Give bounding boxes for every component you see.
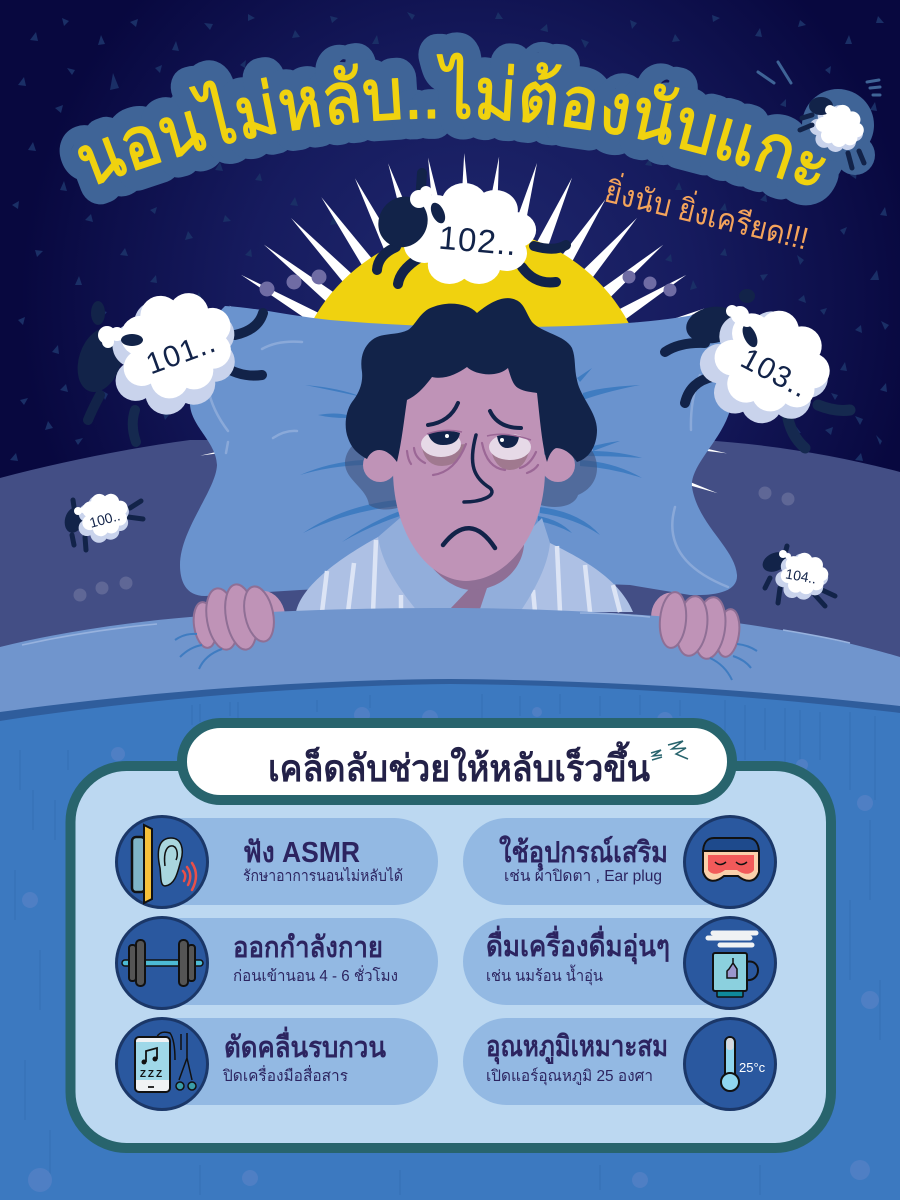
tip: warm drinks: เช่น นมร้อน น้ำอุ่น [486, 964, 603, 986]
title: นอนไม่หลับ..ไม่ต้องนับแกะ [78, 52, 826, 186]
blanket [0, 608, 900, 1200]
blanket texture [15, 694, 880, 1195]
left eye [421, 430, 462, 457]
hill dots [74, 486, 794, 602]
icon: thermometer: 25°c [739, 1060, 766, 1075]
tip: temperature: เปิดแอร์อุณหภูมิ 25 องศา [486, 1067, 653, 1086]
sheep 101 [70, 275, 263, 442]
tip: block distractions: ปิดเครื่องมือสื่อสาร [222, 1065, 348, 1085]
tip: block distractions [116, 1018, 438, 1110]
icon: dumbbell [116, 918, 208, 1008]
tip: exercise: ออกกำลังกาย [233, 932, 383, 964]
sheep 103 [665, 289, 850, 448]
icon: tea mug [684, 918, 776, 1008]
ears [363, 448, 397, 482]
sheep 100 [62, 487, 143, 550]
mouth [443, 528, 495, 548]
sun rays [199, 153, 728, 498]
face [408, 520, 524, 590]
tips panel [70, 723, 831, 1148]
title sheep [758, 62, 880, 175]
tip: temperature [463, 1018, 776, 1110]
man's shirt [296, 518, 633, 612]
right eye [487, 434, 531, 460]
nose [464, 435, 492, 502]
icon: phone and earphones [116, 1018, 208, 1110]
sky confetti texture [10, 12, 889, 472]
hair shadow on pillow [345, 440, 597, 510]
sheep 103: 103.. [735, 342, 814, 405]
sheep 102: 102.. [437, 219, 519, 262]
pillow highlights [208, 342, 728, 587]
tip: temperature: อุณหภูมิเหมาะสม [486, 1031, 668, 1064]
icon: phone and earphones: ZZZ [140, 1069, 164, 1080]
panel heading pill [182, 723, 732, 800]
icon: thermometer [684, 1018, 776, 1110]
subtitle: ยิ่งนับ ยิ่งเครียด!!! [601, 170, 813, 256]
tip: exercise [116, 918, 438, 1008]
night sky background [0, 0, 900, 500]
hand backs behind blanket [244, 585, 691, 639]
tip: ASMR: ฟัง ASMR [243, 837, 360, 869]
title: นอนไม่หลับ..ไม่ต้องนับแกะ [60, 32, 842, 206]
pillow [180, 306, 737, 596]
tip: ASMR: รักษาอาการนอนไม่หลับได้ [243, 867, 403, 885]
tip: accessories: ใช้อุปกรณ์เสริม [499, 835, 668, 870]
tip: warm drinks [463, 918, 776, 1008]
man's head [346, 298, 597, 590]
sheep 104: 104.. [784, 565, 818, 587]
sheep 102 [368, 173, 566, 284]
tip: accessories [463, 816, 776, 908]
tip: exercise: ก่อนเข้านอน 4 - 6 ชั่วโมง [233, 965, 398, 985]
hill behind the bed [0, 440, 900, 700]
sheep 101: 101.. [142, 326, 221, 381]
eyebrows [428, 403, 521, 428]
left hand [175, 582, 279, 669]
pillow creases [300, 368, 642, 542]
hair [346, 298, 597, 462]
under-eye shadows [422, 444, 530, 470]
sun [290, 228, 650, 588]
sheep 100: 100.. [88, 507, 122, 531]
tip: warm drinks: ดื่มเครื่องดื่มอุ่นๆ [486, 925, 670, 964]
panel heading pill: เคล็ดลับช่วยให้หลับเร็วขึ้น [268, 741, 650, 789]
icon: sleep mask [684, 816, 776, 908]
tip: ASMR [116, 816, 438, 908]
tip: accessories: เช่น ผ้าปิดตา , Ear plug [504, 868, 662, 885]
right hand [658, 591, 757, 680]
icon: ear [116, 816, 208, 908]
dots on sun rays [260, 270, 676, 296]
sheep 104 [759, 546, 835, 606]
eye bags [407, 443, 538, 475]
tip: block distractions: ตัดคลื่นรบกวน [224, 1026, 386, 1064]
